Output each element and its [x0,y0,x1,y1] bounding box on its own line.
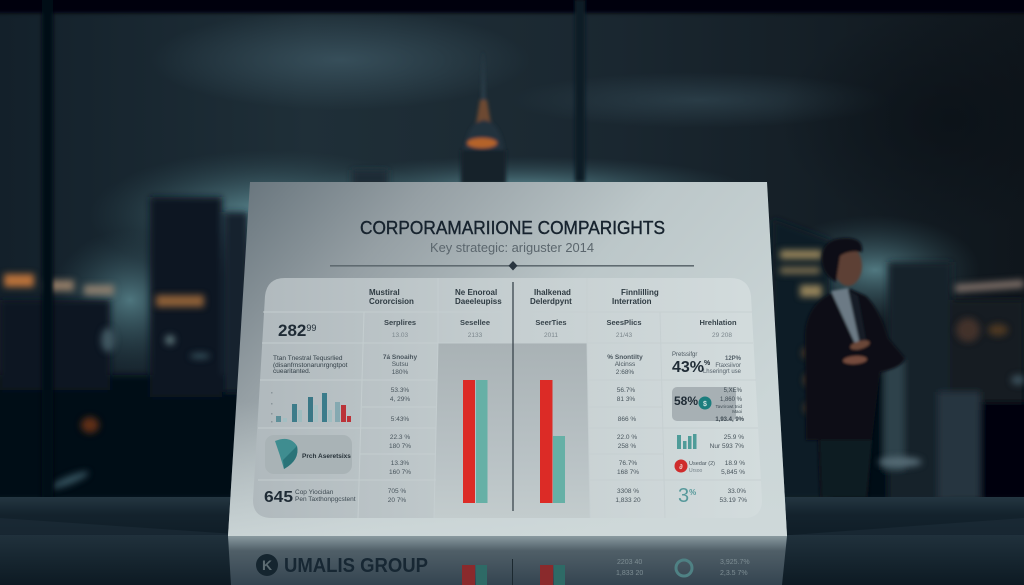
values: column 2: Sutsu [392,361,409,368]
reflection: logo: UMALIS GROUP [284,555,428,577]
values: column 5: 81 3% [617,396,635,403]
text block: description: cuearitanted. [273,368,311,375]
title: CORPORAMARIIONE COMPARIGHTS [360,217,665,238]
column headers: Interration [612,297,652,306]
sub headers [384,318,737,327]
values: column 2: 180 7% [389,443,411,450]
values: column 5: 56.7% [617,387,635,394]
stat: 3%: % [689,488,696,497]
stat: 43%: 43% [672,359,704,376]
values: right column: 18.9 % [725,460,745,467]
comparison table [253,278,762,518]
values: column 5 [607,354,643,504]
callout: 58%: 58% [674,394,698,408]
reflection: figures [616,559,750,577]
column headers: Daeeleupiss [455,297,502,306]
sub headers: SeerTies [535,318,567,327]
reflection: figures: 2,3.5 7% [720,570,748,577]
values: column 2: 13.3% [391,460,409,467]
column headers: Cororcision [369,297,414,306]
sub headers: Serplires [384,318,416,327]
callout: 58%: Tavrirowt tnid [715,404,742,409]
icon: red alert badge: Ursoo [689,468,703,474]
bars: right pair [540,380,565,503]
sub headers: Sesellee [460,318,490,327]
reflection: figures: 2203 40 [617,559,642,566]
grey band: middle columns [434,343,590,518]
stat: 645 [264,489,356,506]
reflection: logo: K [262,557,272,573]
reflection: figures: 3,925.7% [720,559,750,566]
mini chart: teal bars [677,434,696,449]
values: column 5: 2:68% [616,369,634,376]
comparison table: 21/43 [616,332,633,339]
stat: 645: Cop Yiocidan [295,489,334,496]
values: column 5: 168 7% [617,469,639,476]
values: column 5: 3308 % [617,488,639,495]
values: column 2: 705 % [388,488,406,495]
callout: pie chart [265,435,352,474]
stat: 43%: 12P% [725,356,742,362]
values: right column: Nur 593 7% [710,443,744,450]
reflection: bars [462,565,565,585]
stat: 43%: % [704,360,711,367]
callout: 58% [672,387,745,423]
reflection of the panel [228,536,787,585]
callout: 58%: 1,860 % [720,397,743,403]
comparison table: 2011 [544,332,558,339]
values: right column: 5,845 % [721,469,745,476]
stat: 282: 99 [306,323,316,333]
sub headers: SeesPlics [606,318,642,327]
values: column 2: 160 7% [389,469,411,476]
text block: description: (disanfrnstonarunrgngtpot [273,362,348,369]
reflection: figures: 1,833 20 [616,570,643,577]
stat: 43%: Ftaxsiivor [715,363,741,369]
text block: description [273,355,348,375]
chart: grouped bars [271,392,351,422]
stat: 645: Pen Taxthonpgcstent [295,496,356,503]
stat: 282: 282 [278,321,306,340]
column headers: Mustiral [369,288,400,297]
column headers: Ihalkenad [534,288,571,297]
callout: pie chart: Prch Aseretsixs [302,453,351,460]
values: column 2: 5:43% [391,416,409,423]
panel: comparison board [228,182,787,536]
background: blurred city skyline [0,170,1024,502]
callout: 58%: Maoi [732,409,742,414]
values: column 5: 258 % [618,443,636,450]
bars: left pair [463,380,488,503]
values: column 5: 76.7% [619,460,637,467]
figure: businessman with crossed arms [805,238,905,497]
column headers: Delerdpynt [530,297,572,306]
stat: 43%: Lhseringrt use [703,369,742,375]
values: column 5: 866 % [618,416,636,423]
stat: 43% [672,352,742,376]
values: right column: 25.9 % [724,434,744,441]
comparison table: 13.03 [392,332,409,339]
sub headers: Hrehlation [699,318,737,327]
comparison table: 29 208 [712,332,732,339]
values: right column: 33.0% [728,488,746,495]
values: column 2: 4, 29% [390,396,410,403]
icon: red alert badge [674,460,715,474]
column headers: Ne Enoroal [455,288,497,297]
callout: 58%: $ [703,401,707,408]
icon: red alert badge: ∂ [679,463,683,471]
values: column 5: Alcinss [615,361,636,368]
values: column 2: 7á Snoaihy [383,354,418,361]
stat: 43%: Pretssifgr [672,352,697,358]
desk surface [0,497,1024,585]
values: column 2: 20 7% [388,497,406,504]
title divider with diamond [330,261,694,270]
callout: 58%: 1,93.4, 9% [715,417,745,423]
reflection: symbol [676,560,692,576]
values: column 2: 22.3 % [390,434,410,441]
values: column 2 [383,354,418,504]
values: right column [710,434,747,504]
comparison table: 2133 [468,332,483,339]
centre divider [512,282,514,511]
stat: 3%: 3 [678,485,689,507]
icon: red alert badge: Usedar (2) [689,461,715,467]
values: column 2: 180% [392,369,409,376]
column headers: Finnlilling [621,288,659,297]
subtitle: Key strategic: ariguster 2014 [430,240,594,255]
column headers [369,288,659,306]
text block: description: Ttan Tnestral Tequsrlied [273,355,343,362]
values: column 5: 22.0 % [617,434,637,441]
background: central tower [461,50,506,184]
values: right column: 53.19 7% [720,497,747,504]
values: column 2: 53.3% [391,387,409,394]
callout: 58%: 5,XE% [724,388,743,394]
stat: 645: 645 [264,489,293,506]
values: column 5: 1,833 20 [615,497,641,504]
values: column 5: % Snontilty [607,354,643,361]
